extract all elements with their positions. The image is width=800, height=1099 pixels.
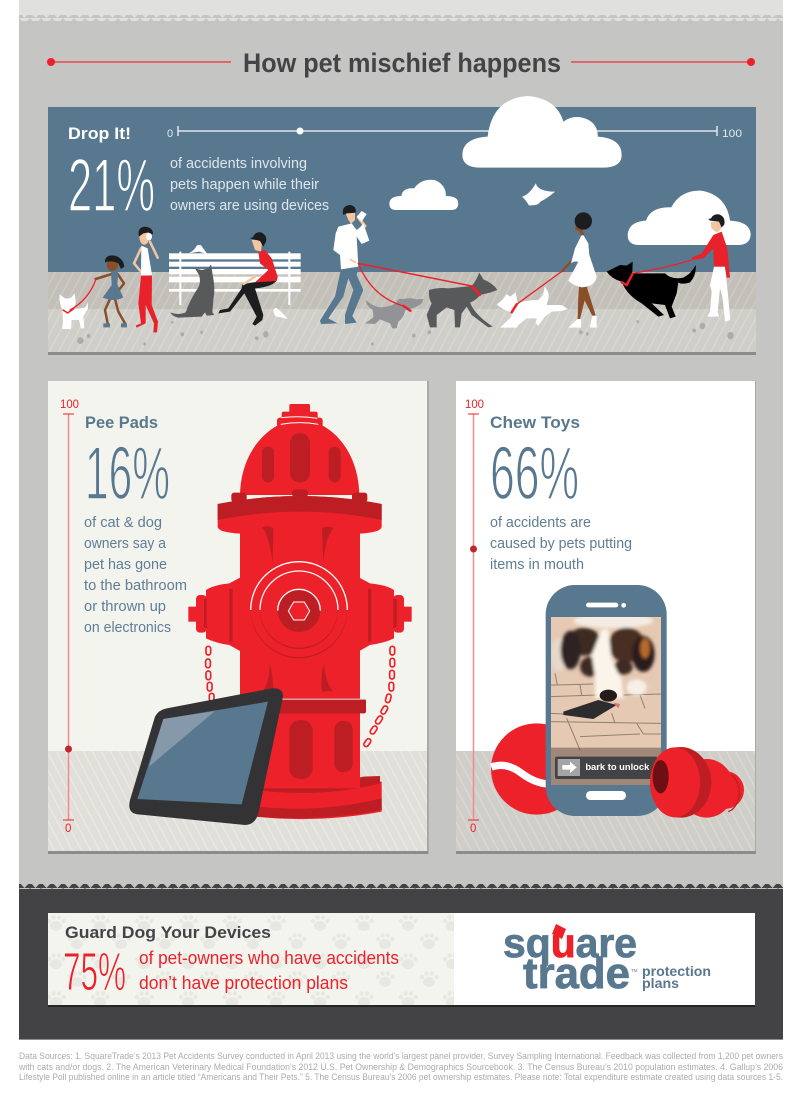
panel: Guard Dog Your Devices (48, 913, 755, 1007)
body (240, 528, 360, 788)
title: How pet mischief happens (243, 48, 561, 78)
stat: 75%: 75% (63, 942, 126, 1002)
ground specks (77, 320, 734, 346)
unlock slider: bark to unlock (585, 762, 650, 772)
lower body pills (289, 720, 313, 779)
leashes and collars (358, 263, 480, 311)
logo: squaretrade (503, 920, 711, 998)
text: accidents with devices: of accidents involving (170, 155, 307, 172)
base (255, 782, 382, 819)
chihuahua (60, 293, 88, 329)
leashes and collars (512, 260, 692, 312)
panel: Chew Toys (456, 381, 756, 854)
text: pee pads description: to the bathroom (84, 577, 187, 594)
logo: squaretrade: protection (642, 963, 711, 979)
text: no protection plans: don’t have protection plans (139, 973, 348, 993)
white dog (497, 287, 568, 328)
logo: squaretrade: TM (631, 968, 638, 973)
tablet (129, 688, 283, 825)
illustration: woman with white dog, man with black dog (497, 212, 730, 328)
stat: 16%: 16% (85, 431, 170, 515)
vertical scale (465, 399, 484, 835)
vertical scale: 0 (65, 823, 71, 835)
stat: 21%: 21% (68, 143, 155, 227)
leash (70, 280, 96, 310)
clouds and flying bird (389, 96, 751, 245)
slider scale (167, 126, 742, 140)
text: chew toys description: caused by pets putting (490, 535, 632, 552)
vertical scale: 100 (60, 399, 79, 411)
man in red (692, 214, 730, 322)
girl (96, 255, 127, 327)
man with phone (320, 205, 369, 324)
logo: squaretrade: square (503, 920, 637, 966)
text: no protection plans: of pet-owners who have accidents (139, 948, 399, 968)
vertical scale: 100 (465, 399, 484, 411)
illustration: man walking two dogs (320, 205, 497, 328)
photo of dog with phone (551, 613, 661, 785)
text: chew toys description: of accidents are (490, 514, 591, 531)
valve (251, 562, 347, 658)
text: pee pads description (84, 514, 187, 636)
text: chew toys description: items in mouth (490, 556, 584, 573)
pigeon (273, 308, 288, 319)
text: pee pads description: pet has gone (84, 556, 167, 573)
illustration: fire hydrant with tablet (129, 404, 412, 825)
bird on bench (188, 245, 208, 254)
title (47, 48, 755, 78)
heading: Drop It: Drop It! (68, 124, 131, 143)
heading: Pee Pads: Pee Pads (85, 413, 158, 432)
stat: 66%: 66% (490, 431, 579, 515)
text: no protection plans (139, 948, 399, 993)
seated man (218, 232, 278, 326)
illustration: girl, woman, bench, cat, seated man (60, 227, 301, 332)
panel: Pee Pads (48, 381, 429, 854)
smartphone (546, 585, 667, 816)
small gray dog (365, 298, 423, 328)
heading: Chew Toys: Chew Toys (490, 413, 580, 432)
flange (218, 496, 382, 534)
panel: Drop It (48, 96, 756, 355)
data sources (18, 1051, 783, 1083)
chains (206, 646, 395, 748)
black dog (607, 262, 696, 318)
text: accidents with devices: pets happen while their (170, 176, 319, 193)
logo: squaretrade: plans (642, 975, 679, 991)
illustration: phone and chew toys (491, 585, 744, 818)
text: accidents with devices: owners are using devices (170, 197, 329, 214)
text: pee pads description: or thrown up (84, 598, 166, 615)
red chew toy (650, 747, 744, 818)
cat (170, 264, 214, 318)
woman with phone (134, 227, 158, 332)
slider scale: 0 (167, 128, 173, 140)
red ball (491, 723, 582, 815)
band (270, 699, 366, 713)
slider scale: 100 (722, 128, 742, 140)
heading: Guard Dog Your Devices (65, 923, 271, 942)
side caps (206, 578, 240, 651)
text: pee pads description: owners say a (84, 535, 167, 552)
text: chew toys description (490, 514, 632, 573)
woman in white dress (562, 212, 597, 328)
text: accidents with devices (170, 155, 329, 214)
dome (240, 425, 359, 495)
body shadows (262, 526, 333, 692)
vertical scale: 0 (470, 823, 476, 835)
text: pee pads description: on electronics (84, 619, 171, 636)
unlock slider (555, 757, 658, 779)
text: pee pads description: of cat & dog (84, 514, 162, 531)
vertical scale (60, 399, 79, 835)
logo: squaretrade: trade (523, 949, 630, 998)
large gray dog (427, 273, 497, 327)
bench (169, 252, 301, 305)
